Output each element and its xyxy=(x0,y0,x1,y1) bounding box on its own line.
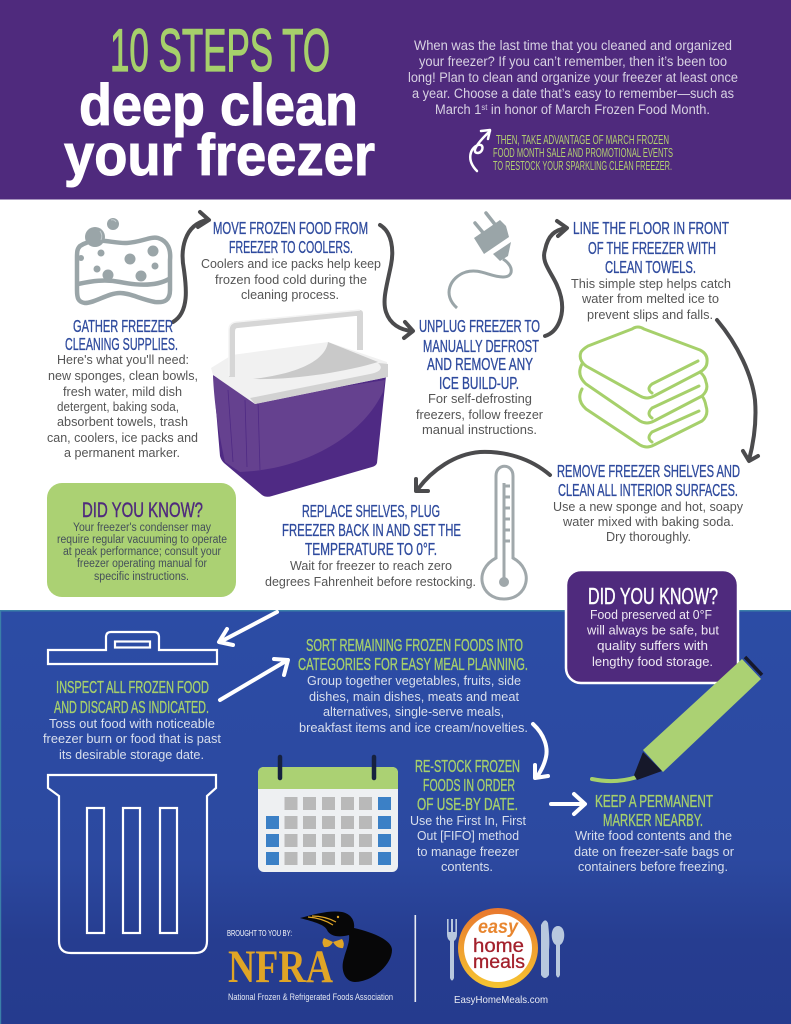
body text: For self-defrosting xyxy=(428,392,532,406)
heading: FREEZER TO COOLERS. xyxy=(229,237,353,257)
icon: plate badge xyxy=(458,908,538,988)
body text: water mixed with baking soda. xyxy=(562,515,734,529)
intro text xyxy=(408,38,738,117)
panel: did you know purple xyxy=(566,570,738,683)
step 3: unplug xyxy=(416,316,543,437)
title xyxy=(64,17,375,188)
body text: Group together vegetables, fruits, side xyxy=(307,674,521,688)
body text: require regular vacuuming to operate xyxy=(57,534,227,546)
heading: REPLACE SHELVES, PLUG xyxy=(302,501,440,521)
body text xyxy=(43,717,222,762)
wordmark: NFRA xyxy=(228,941,333,993)
step 2: move food xyxy=(201,218,381,302)
heading xyxy=(298,635,528,674)
heading: UNPLUG FREEZER TO xyxy=(419,316,540,336)
heading: MANUALLY DEFROST xyxy=(423,336,539,356)
intro text: your freezer? If you can’t remember, then it’s been too xyxy=(419,54,727,69)
arrow: shelves to replace xyxy=(416,452,550,491)
body text: containers before freezing. xyxy=(578,860,728,874)
body text xyxy=(265,559,476,589)
logo: NFRA xyxy=(227,911,393,1003)
body text: freezers, follow freezer xyxy=(416,408,543,422)
brought to you by: BROUGHT TO YOU BY: xyxy=(227,928,292,938)
heading: FREEZER BACK IN AND SET THE xyxy=(282,520,461,540)
panel: blue lower section xyxy=(0,610,791,1024)
association name: National Frozen & Refrigerated Foods Association xyxy=(228,992,393,1003)
body text: degrees Fahrenheit before restocking. xyxy=(265,575,476,589)
body text xyxy=(201,257,381,302)
body text: specific instructions. xyxy=(94,571,189,583)
icon: fork xyxy=(447,919,457,980)
icon: trash can xyxy=(48,775,216,953)
title: deep clean xyxy=(79,73,358,138)
icon: cooler xyxy=(211,310,388,497)
icon: trash lid xyxy=(48,632,217,664)
body text xyxy=(47,353,198,460)
callout: restock: THEN, TAKE ADVANTAGE OF MARCH FROZEN xyxy=(496,133,669,147)
body text xyxy=(574,829,734,874)
intro text: long! Plan to clean and organize your freezer at least once xyxy=(408,70,738,85)
callout: restock: TO RESTOCK YOUR SPARKLING CLEAN FREEZER. xyxy=(493,159,672,173)
heading: DID YOU KNOW? xyxy=(82,499,203,522)
arrow: replace to inspect xyxy=(219,612,277,645)
body text: detergent, baking soda, xyxy=(57,400,179,414)
step 6: replace shelves xyxy=(265,501,476,589)
callout: restock: FOOD MONTH SALE AND PROMOTIONAL EVENTS xyxy=(493,146,673,160)
body text: cleaning process. xyxy=(241,288,339,302)
heading: SORT REMAINING FROZEN FOODS INTO xyxy=(306,635,523,655)
arrow: sort to restock xyxy=(533,724,548,778)
panel: did you know green xyxy=(47,483,236,597)
icon: folded towels xyxy=(580,327,707,447)
heading xyxy=(419,316,540,393)
heading xyxy=(557,461,740,500)
heading: GATHER FREEZER xyxy=(73,316,173,336)
body text: breakfast items and ice cream/novelties. xyxy=(299,721,528,735)
heading: ICE BUILD-UP. xyxy=(439,373,519,393)
body text: Dry thoroughly. xyxy=(606,530,691,544)
body text: fresh water, mild dish xyxy=(63,385,182,399)
arrow: coolers to unplug xyxy=(380,225,413,338)
body text: its desirable storage date. xyxy=(59,748,204,762)
icon: knife xyxy=(541,920,549,978)
intro text: When was the last time that you cleaned and organized xyxy=(414,38,732,53)
body text: manual instructions. xyxy=(422,423,537,437)
step 4: line the floor xyxy=(571,218,731,322)
heading xyxy=(213,218,368,257)
arrow: towels to shelves xyxy=(717,320,758,461)
body text: This simple step helps catch xyxy=(571,277,731,291)
body text: freezer operating manual for xyxy=(77,558,207,570)
intro text: a year. Choose a date that’s easy to remember—such as xyxy=(412,86,734,101)
heading: DID YOU KNOW? xyxy=(588,583,718,609)
heading: AND REMOVE ANY xyxy=(427,354,533,374)
heading: CATEGORIES FOR EASY MEAL PLANNING. xyxy=(298,654,528,674)
icon: plate badge: home xyxy=(473,936,524,957)
heading: MARKER NEARBY. xyxy=(603,810,703,830)
body text: water from melted ice to xyxy=(581,292,719,306)
website: EasyHomeMeals.com xyxy=(454,994,548,1006)
icon: plug xyxy=(449,213,511,308)
heading: CLEANING SUPPLIES. xyxy=(65,334,178,354)
panel: header xyxy=(0,0,791,200)
icon: spoon xyxy=(552,926,564,978)
body text xyxy=(57,522,227,583)
heading: AND DISCARD AS INDICATED. xyxy=(54,697,209,717)
heading: OF THE FREEZER WITH xyxy=(588,238,716,258)
logo: Easy Home Meals xyxy=(447,908,564,1006)
icon: thermometer xyxy=(482,466,526,599)
body text: Toss out food with noticeable xyxy=(49,717,215,731)
body text: Here's what you'll need: xyxy=(57,353,189,367)
icon: penguin xyxy=(300,911,392,982)
body text: quality suffers with xyxy=(597,638,708,653)
body text: freezer burn or food that is past xyxy=(43,732,222,746)
heading: CLEAN TOWELS. xyxy=(605,257,696,277)
icon: sponge xyxy=(77,218,170,303)
intro text: in honor of March Frozen Food Month. xyxy=(487,102,710,117)
arrow: unplug to towels xyxy=(544,221,567,336)
intro text: st xyxy=(481,103,488,112)
body text xyxy=(410,814,526,874)
body text: alternatives, single-serve meals, xyxy=(323,705,504,719)
body text: Write food contents and the xyxy=(575,829,732,843)
heading xyxy=(65,316,178,354)
body text: absorbent towels, trash xyxy=(57,415,188,429)
body text: a permanent marker. xyxy=(64,446,180,460)
body text xyxy=(299,674,528,735)
step 8: sort xyxy=(298,635,528,735)
icon: calendar xyxy=(258,757,398,872)
body text: Out [FIFO] method xyxy=(417,829,519,843)
title: your freezer xyxy=(64,123,375,188)
body text: prevent slips and falls. xyxy=(587,308,713,322)
body text: at peak performance; consult your xyxy=(63,546,221,558)
step 1: gather supplies xyxy=(47,316,198,460)
body text xyxy=(416,392,543,437)
step 9: restock xyxy=(410,756,526,874)
heading: FOODS IN ORDER xyxy=(423,775,515,795)
icon: looped arrow xyxy=(470,130,490,171)
body text: will always be safe, but xyxy=(586,622,719,638)
arrow: sponge to coolers xyxy=(173,212,209,322)
step 5: remove shelves xyxy=(553,461,744,544)
heading: KEEP A PERMANENT xyxy=(595,791,713,811)
heading xyxy=(415,756,520,814)
body text xyxy=(586,607,719,669)
callout: restock xyxy=(493,133,673,173)
body text: can, coolers, ice packs and xyxy=(47,431,198,445)
heading: MOVE FROZEN FOOD FROM xyxy=(213,218,368,238)
body text: Use the First In, First xyxy=(410,814,526,828)
arrow: inspect to sort xyxy=(220,659,288,700)
heading xyxy=(595,791,713,830)
heading: RE-STOCK FROZEN xyxy=(415,756,520,776)
body text xyxy=(571,277,731,322)
body text: contents. xyxy=(441,860,493,874)
step 7: inspect xyxy=(43,677,222,762)
body text xyxy=(553,500,744,544)
step 10: keep marker xyxy=(574,791,734,874)
body text: new sponges, clean bowls, xyxy=(48,369,198,383)
body text: Use a new sponge and hot, soapy xyxy=(553,500,744,514)
icon: marker xyxy=(592,657,762,781)
heading xyxy=(282,501,461,559)
title: 10 STEPS TO xyxy=(110,17,330,84)
heading xyxy=(573,218,729,277)
heading: OF USE-BY DATE. xyxy=(417,794,518,814)
body text: Your freezer's condenser may xyxy=(73,522,211,534)
body text: Wait for freezer to reach zero xyxy=(290,559,452,573)
icon: plate badge: easy xyxy=(478,917,519,938)
body text: Food preserved at 0°F xyxy=(590,607,712,622)
icon: plate badge: meals xyxy=(473,952,525,973)
intro text: March 1 xyxy=(435,102,483,117)
body text: lengthy food storage. xyxy=(592,654,713,669)
heading xyxy=(54,677,209,717)
arrow: restock to marker xyxy=(551,794,585,814)
body text: Coolers and ice packs help keep xyxy=(201,257,381,271)
body text: date on freezer-safe bags or xyxy=(574,845,734,859)
heading: TEMPERATURE TO 0°F. xyxy=(305,539,437,559)
body text: to manage freezer xyxy=(417,845,519,859)
heading: INSPECT ALL FROZEN FOOD xyxy=(56,677,209,697)
body text: frozen food cold during the xyxy=(215,273,367,287)
body text: dishes, main dishes, meats and meat xyxy=(309,690,520,704)
